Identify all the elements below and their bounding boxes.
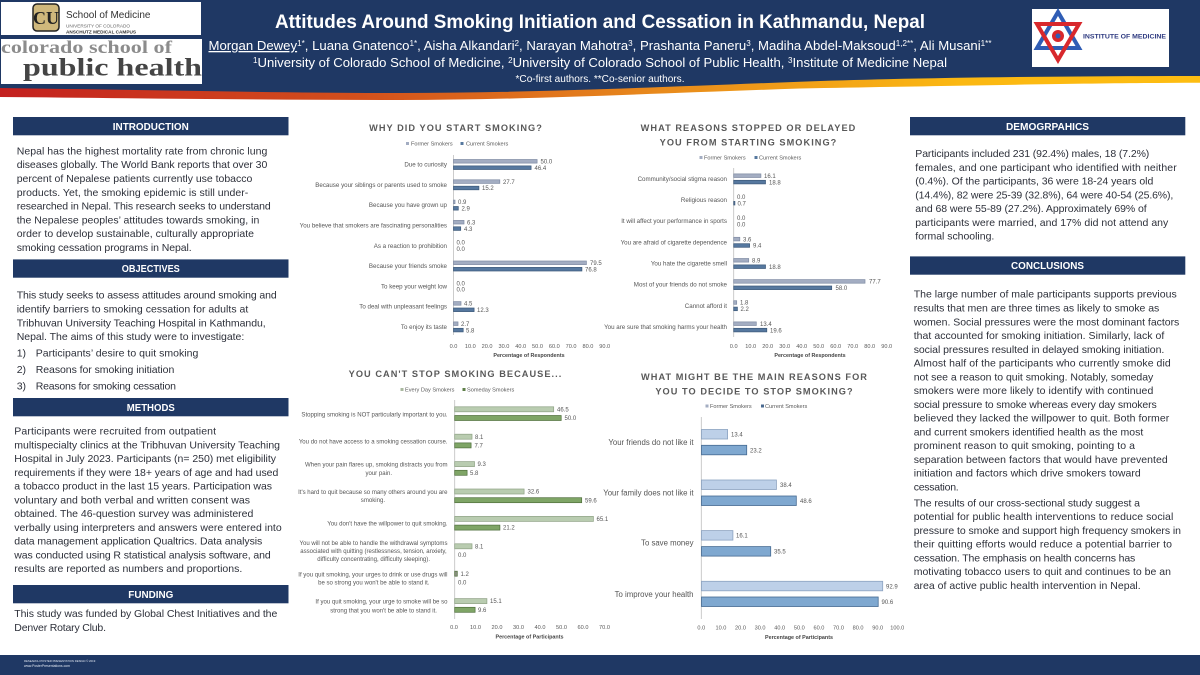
authors: , Luana Gnatenco [305, 38, 409, 53]
category labels: It will affect your performance in sports [621, 218, 727, 225]
bars and values: 8.9 [752, 258, 761, 264]
text: introduction body: order to develop sustainable, culturally appropriate [17, 228, 254, 240]
footer credit: RESEARCH POSTER PRESENTATION DESIGN © 2019 [24, 659, 96, 663]
category labels: You believe that smokers are fascinating personalities [300, 222, 447, 230]
heading: demographics [910, 117, 1185, 135]
heading: methods [13, 398, 288, 416]
text: objectives body: Reasons for smoking initiation [36, 364, 174, 376]
x axis [730, 344, 892, 359]
header accent stripe [0, 76, 1200, 100]
text: conclusions paragraph 1: The large number of male participants supports previous [914, 289, 1177, 301]
panel: methods [13, 398, 288, 575]
text: funding body: This study was funded by Global Chest Initiatives and the [14, 608, 277, 620]
category labels: Community/social stigma reason [638, 176, 728, 183]
bars and values: 9.4 [753, 244, 762, 250]
bars and values: 76.8 [585, 267, 597, 273]
bars and values: 92.9 [886, 584, 898, 590]
bars and values [734, 174, 881, 334]
legend [706, 404, 807, 410]
title: Attitudes Around Smoking Initiation and Cessation in Kathmandu, Nepal [275, 11, 925, 33]
text: objectives body: 2) [17, 364, 26, 376]
x axis: 70.0 [847, 344, 858, 350]
chart: main reasons to decide to stop smoking [603, 372, 904, 641]
heading: conclusions [910, 256, 1185, 275]
text: conclusions paragraph 1: women. Social pressures were the most dominant factors [913, 316, 1179, 328]
text: introduction body: percent of Nepalese patients currently use tobacco [17, 173, 252, 185]
bars and values: 0.0 [458, 553, 467, 559]
text: conclusions paragraph 1: that accounted for smoking initiation. Similarly, lack of [914, 330, 1164, 342]
x axis: 10.0 [470, 625, 481, 631]
heading: funding: FUNDING [128, 590, 174, 601]
x axis: 90.0 [881, 344, 892, 350]
x axis: 50.0 [532, 344, 543, 350]
text: conclusions paragraph 1: initiation and factors which drive smokers toward [914, 468, 1141, 480]
bars and values: 15.1 [490, 599, 502, 605]
text: methods body: Participants were recruited from outpatient [14, 426, 216, 438]
x axis: Percentage of Respondents [774, 353, 846, 359]
x axis: 50.0 [794, 625, 805, 631]
text: objectives body: Participants’ desire to quit smoking [36, 347, 198, 359]
x axis: 0.0 [697, 625, 705, 631]
category labels: To deal with unpleasant feelings [359, 304, 447, 311]
category labels [298, 413, 448, 614]
heading: introduction: INTRODUCTION [113, 122, 189, 133]
bars and values: 38.4 [780, 483, 792, 489]
co-author note: *Co-first authors. **Co-senior authors. [516, 74, 684, 85]
logo: CU School of Medicine [1, 2, 201, 35]
x axis: 40.0 [535, 625, 545, 631]
bars and values: 7.7 [474, 444, 484, 450]
category labels: Because your friends smoke [369, 263, 448, 270]
bars and values: 46.4 [534, 166, 547, 172]
x axis: 20.0 [482, 344, 493, 350]
bars and values: 0.0 [456, 288, 466, 294]
text: methods body: obtained. The 46-question survey was administered [14, 508, 253, 520]
logo: Institute of Medicine [1032, 9, 1169, 67]
logo: CU School of Medicine: School of Medicine [66, 10, 151, 21]
bars and values: 0.0 [737, 195, 746, 201]
bars and values: 0.0 [456, 241, 466, 247]
category labels: Your friends do not like it [608, 438, 694, 447]
authors: 3 [628, 39, 633, 48]
heading: methods: METHODS [127, 403, 175, 414]
heading: objectives: OBJECTIVES [122, 264, 180, 275]
x axis [450, 344, 610, 359]
x axis: 40.0 [774, 625, 785, 631]
bars and values [455, 407, 609, 614]
x axis: 60.0 [830, 344, 841, 350]
text: conclusions paragraph 2 [914, 497, 1181, 592]
x axis: 0.0 [450, 625, 458, 631]
authors: , Ali Musani [913, 38, 981, 53]
category labels: You are afraid of cigarette dependence [621, 239, 728, 246]
category labels: To save money [641, 539, 694, 548]
bars and values: 0.0 [458, 581, 467, 587]
legend [400, 388, 514, 394]
text: demographics body: and 68 were 55-89 (27.2%). Approximately 69% of [915, 203, 1147, 215]
category labels: strong that you won't be able to stand it. [330, 608, 437, 614]
x axis: 20.0 [735, 625, 746, 631]
text: introduction body: Nepal has the highest mortality rate from chronic lung [17, 145, 267, 157]
x axis: 30.0 [755, 625, 766, 631]
bars and values [454, 160, 602, 334]
authors: 1* [409, 39, 417, 48]
category labels: You don't have the willpower to quit smoking. [327, 521, 448, 527]
text: objectives body: 1) [17, 347, 26, 359]
legend [700, 156, 801, 162]
text: conclusions paragraph 1: prominent reason to quit smoking, pointing to a [914, 440, 1135, 452]
bars and values: 3.6 [743, 237, 752, 243]
affiliations: University of Colorado School of Medicine, [257, 55, 508, 70]
heading: funding [13, 585, 288, 603]
x axis: 30.0 [779, 344, 790, 350]
chart title: WHAT MIGHT BE THE MAIN REASONS FOR [641, 372, 868, 382]
chart title: YOU FROM STARTING SMOKING? [660, 138, 837, 148]
text: methods body: data management application Qualtrics. Data analysis [14, 536, 262, 548]
x axis: 0.0 [730, 344, 738, 350]
bars and values: 2.9 [462, 206, 471, 212]
text: methods body: was conducted using R statistical analysis software, and [13, 549, 271, 561]
category labels: difficulty concentrating, difficulty sleeping). [317, 557, 430, 563]
category labels: To keep your weight low [381, 283, 448, 290]
text: methods body: a tobacco product in the last 15 years. Participation was [14, 481, 272, 493]
bars and values: 12.3 [477, 308, 489, 314]
bars and values: 32.6 [528, 490, 540, 496]
bars and values: 2.7 [461, 322, 470, 328]
legend: Former Smokers [704, 156, 746, 162]
text: demographics body: (14.4%), 82 were 25-39 (32.8%), 64 were 40-54 (25.6%), [915, 189, 1173, 201]
x axis: 70.0 [599, 625, 610, 631]
bars and values [702, 430, 898, 606]
bars and values: 6.3 [467, 220, 476, 226]
category labels [604, 176, 728, 331]
text: conclusions paragraph 1: cessation. [914, 481, 959, 493]
text: methods body [13, 426, 282, 575]
bars and values: 50.0 [564, 416, 577, 422]
bars and values: 48.6 [800, 499, 812, 505]
category labels: You are sure that smoking harms your health [604, 324, 728, 331]
bars and values: 90.6 [882, 600, 894, 606]
bars and values: 58.0 [836, 286, 848, 292]
panel: objectives [13, 259, 288, 393]
chart title: WHY DID YOU START SMOKING? [369, 123, 543, 133]
bars and values: 13.4 [760, 322, 772, 328]
bars and values: 0.7 [738, 201, 747, 207]
authors: 1,2** [896, 39, 913, 48]
x axis: 90.0 [599, 344, 610, 350]
text: funding body: Denver Rotary Club. [14, 622, 106, 634]
bars and values: 35.5 [774, 550, 786, 556]
x axis: Percentage of Participants [765, 635, 833, 641]
bars and values: 1.2 [460, 572, 470, 578]
chart: you can't stop smoking because [298, 369, 610, 641]
text: introduction body: researched in Nepal. This research seeks to understand [17, 201, 271, 213]
text: methods body: voluntary and both verbal and written consent was [14, 494, 250, 506]
panel: funding [13, 585, 288, 634]
x axis: 30.0 [498, 344, 509, 350]
bars and values: 27.7 [503, 180, 515, 186]
bars and values: 46.5 [557, 407, 569, 413]
x axis: 10.0 [465, 344, 476, 350]
text: demographics body: participants were married, and 17% did not attend any [915, 217, 1169, 229]
x axis: 10.0 [745, 344, 756, 350]
legend: Someday Smokers [467, 388, 514, 394]
category labels: To enjoy its taste [401, 324, 448, 331]
x axis: 80.0 [864, 344, 875, 350]
logo: Colorado School of Public Health: colorado school of [1, 37, 173, 57]
logo: Colorado School of Public Health: public health [23, 54, 202, 82]
bars and values: 9.6 [478, 608, 487, 614]
heading: demographics: DEMOGRPAHICS [1006, 122, 1089, 133]
affiliations: University of Colorado School of Public Health, [513, 55, 788, 70]
bars and values: 4.5 [464, 302, 473, 308]
category labels: It's hard to quit because so many others around you are [298, 490, 448, 496]
authors: , Madiha Abdel-Maksoud [751, 38, 896, 53]
bars and values: 1.8 [740, 301, 749, 307]
bars and values: 8.1 [475, 435, 484, 441]
affiliations: 1 [253, 56, 258, 65]
x axis: Percentage of Participants [495, 635, 564, 641]
authors: 2 [515, 39, 520, 48]
category labels: be so strong you won't be able to stand it. [318, 581, 430, 587]
header banner [0, 0, 1200, 100]
text: introduction body [17, 145, 271, 254]
category labels: Because you have grown up [369, 202, 448, 209]
text: objectives body [17, 290, 277, 393]
x axis: 100.0 [890, 625, 904, 631]
bars and values: 23.2 [750, 448, 762, 454]
category labels: To improve your health [615, 590, 694, 599]
category labels: Cannot afford it [685, 303, 727, 310]
category labels: As a reaction to prohibition [374, 243, 448, 250]
x axis: 60.0 [813, 625, 824, 631]
x axis: 80.0 [853, 625, 864, 631]
text: objectives body: Nepal. The aims of this study were to investigate: [17, 331, 244, 343]
text: conclusions paragraph 2: pressure to smoke and support high frequency smokers in [914, 525, 1181, 537]
logo: Colorado School of Public Health [1, 37, 202, 84]
chart: why did you start smoking [300, 123, 610, 359]
bars and values: 65.1 [596, 517, 609, 523]
text: demographics body: females, and one participant who identified with neither [915, 162, 1177, 174]
category labels: Due to curiosity [404, 162, 448, 169]
chart title: WHAT REASONS STOPPED OR DELAYED [641, 123, 856, 133]
text: introduction body: smoking cessation programs in Nepal. [17, 242, 192, 254]
category labels: smoking. [361, 498, 385, 504]
legend: Former Smokers [710, 404, 752, 410]
authors: Morgan Dewey [208, 38, 298, 53]
x axis: 70.0 [833, 625, 844, 631]
category labels: Stopping smoking is NOT particularly important to you. [301, 413, 448, 419]
bars and values: 0.0 [737, 216, 746, 222]
bars and values: 16.1 [764, 174, 776, 180]
affiliations: Institute of Medicine Nepal [793, 55, 947, 70]
text: objectives body: Tribhuvan University Teaching Hospital in Kathmandu, [17, 317, 266, 329]
logo: CU School of Medicine: CU [33, 8, 59, 28]
text: methods body: verbally using interpreters and answers were entered into [14, 522, 282, 534]
bars and values: 13.4 [731, 432, 743, 438]
text: conclusions paragraph 1: smokers were more likely to identify with continued [914, 385, 1153, 397]
text: introduction body: diseases globally. The World Bank reports that over 30 [17, 159, 267, 171]
legend: Current Smokers [759, 156, 801, 162]
affiliations: 3 [788, 56, 793, 65]
x axis: 90.0 [872, 625, 883, 631]
bars and values: 18.8 [769, 180, 781, 186]
x axis: 60.0 [578, 625, 588, 631]
legend: Former Smokers [411, 142, 453, 148]
legend: Every Day Smokers [405, 388, 455, 394]
text: methods body: results are reported as numbers and proportions. [14, 563, 242, 575]
text: demographics body: (0.4%). Of the participants, 36 were 18-24 years old [915, 176, 1153, 188]
category labels: If you quit smoking, your urge to smoke will be so [315, 600, 448, 606]
bars and values: 2.2 [740, 307, 750, 313]
bars and values: 59.6 [585, 498, 597, 504]
authors: 1** [981, 39, 992, 48]
category labels: associated with quitting (restlessness, tension, anxiety, [300, 549, 447, 555]
x axis [450, 625, 610, 641]
x axis: 80.0 [582, 344, 593, 350]
bars and values: 0.0 [737, 223, 746, 229]
x axis: 40.0 [796, 344, 807, 350]
text: objectives body: This study seeks to assess attitudes around smoking and [17, 290, 277, 302]
logo: Institute of Medicine: INSTITUTE OF MEDICINE [1083, 34, 1166, 40]
category labels: Your family does not like it [603, 488, 694, 497]
bars and values: 21.2 [503, 526, 515, 532]
bars and values: 5.8 [466, 328, 475, 334]
x axis: 60.0 [549, 344, 560, 350]
text: demographics body: Participants included 231 (92.4%) males, 18 (7.2%) [915, 148, 1149, 160]
text: objectives body: Reasons for smoking cessation [36, 381, 176, 393]
x axis: Percentage of Respondents [493, 353, 565, 359]
bars and values: 79.5 [590, 261, 602, 267]
category labels: If you quit smoking, your urges to drink or use drugs will [298, 573, 448, 579]
text: introduction body: the Nepalese peoples’ attitudes towards smoking, in [17, 214, 259, 226]
bars and values: 8.1 [475, 544, 484, 550]
category labels: You do not have access to a smoking cessation course. [299, 439, 448, 445]
heading: introduction [13, 117, 288, 135]
authors: 1* [297, 39, 305, 48]
bars and values: 19.6 [770, 328, 782, 334]
category labels: Because your siblings or parents used to smoke [315, 182, 448, 189]
text: conclusions paragraph 2: potential for public health interventions to reduce social [914, 511, 1173, 523]
text: conclusions paragraph 1: not see a reason to quit smoking. Notably, someday [914, 371, 1154, 383]
heading: conclusions: CONCLUSIONS [1011, 261, 1084, 272]
text: conclusions paragraph 2: motivating tobacco users to quit and continues to be an [914, 566, 1171, 578]
legend [406, 142, 508, 148]
x axis: 30.0 [513, 625, 524, 631]
footer credit: www.PosterPresentations.com [24, 664, 70, 668]
chart title: YOU TO DECIDE TO STOP SMOKING? [655, 386, 854, 396]
text: conclusions paragraph 1: results that men are three times as likely to smoke as [914, 302, 1159, 314]
text: conclusions paragraph 1 [913, 289, 1179, 493]
category labels: You hate the cigarette smell [651, 260, 727, 268]
category labels: your pain. [365, 471, 392, 477]
bars and values: 0.0 [456, 281, 466, 287]
text: objectives body: identify barriers to smoking cessation for adults at [17, 304, 248, 316]
text: conclusions paragraph 2: their quitting efforts would reduce a potential barrier to [914, 539, 1172, 551]
x axis: 70.0 [566, 344, 577, 350]
text: objectives body: 3) [17, 381, 26, 393]
bars and values: 0.9 [458, 200, 467, 206]
text: conclusions paragraph 1: believed they lacked the willpower to quit. Both former [914, 413, 1170, 425]
text: conclusions paragraph 1: Almost half of the participants who currently smoke did [914, 358, 1171, 370]
text: conclusions paragraph 1: and current smokers identified health as the most [914, 426, 1143, 438]
x axis: 40.0 [515, 344, 526, 350]
bars and values: 18.8 [769, 265, 781, 271]
logo: CU School of Medicine: UNIVERSITY OF COLORADO [66, 24, 130, 28]
text: methods body: Hospital in July 2023. Participants (n= 250) met eligibility [14, 453, 277, 465]
authors: , Aisha Alkandari [417, 38, 515, 53]
authors: , Narayan Mahotra [519, 38, 629, 53]
x axis: 20.0 [492, 625, 502, 631]
category labels: When your pain flares up, smoking distracts you from [305, 462, 448, 468]
category labels: Religious reason [681, 197, 728, 204]
authors: , Prashanta Paneru [633, 38, 746, 53]
panel: introduction [13, 117, 288, 254]
text: conclusions paragraph 1: separation between factors that would have prevented [914, 454, 1168, 466]
text: conclusions paragraph 1: social pressure to smoke whereas every day smokers [914, 399, 1157, 411]
category labels: Most of your friends do not smoke [634, 282, 728, 289]
panel: conclusions [910, 256, 1185, 592]
x axis: 10.0 [715, 625, 726, 631]
category labels [300, 162, 448, 331]
authors: 3 [746, 39, 751, 48]
category labels [603, 438, 694, 599]
x axis: 20.0 [762, 344, 773, 350]
bars and values: 4.3 [464, 227, 473, 233]
affiliations: 2 [508, 56, 513, 65]
text: conclusions paragraph 2: area of active public health intervention in Nepal. [914, 580, 1141, 592]
logo: CU School of Medicine: ANSCHUTZ MEDICAL CAMPUS [66, 30, 136, 34]
bars and values: 15.2 [482, 186, 494, 192]
text: demographics body [915, 148, 1177, 243]
text: conclusions paragraph 1: social pressures resulted in delayed smoking initiation. [914, 344, 1164, 356]
text: conclusions paragraph 2: The results of our cross-sectional study suggest a [914, 497, 1140, 509]
bars and values: 5.8 [470, 471, 479, 477]
bars and values: 77.7 [869, 280, 881, 286]
panel: demographics [910, 117, 1185, 243]
category labels: You will not be able to handle the withdrawal symptoms [299, 541, 448, 547]
text: introduction body: products. Yet, the smoking epidemic is still under- [17, 187, 249, 199]
chart title: YOU CAN'T STOP SMOKING BECAUSE... [349, 369, 562, 379]
legend: Current Smokers [765, 404, 807, 410]
bars and values: 9.3 [478, 462, 487, 468]
x axis: 50.0 [813, 344, 824, 350]
footer bar [0, 655, 1200, 675]
x axis: 0.0 [450, 344, 457, 350]
x axis: 50.0 [556, 625, 567, 631]
bars and values: 50.0 [540, 160, 553, 166]
bars and values: 16.1 [736, 534, 748, 540]
text: methods body: requirements if they were 18+ years of age and had used [14, 467, 278, 479]
text: demographics body: formal schooling. [915, 231, 994, 243]
text: methods body: multispecialty clinics at the Tribhuvan University Teaching [14, 439, 280, 451]
legend: Current Smokers [466, 142, 508, 148]
text: conclusions paragraph 2: cessation. The emphasis on health concerns has [914, 552, 1135, 564]
heading: objectives [13, 259, 288, 278]
bars and values: 0.0 [456, 247, 466, 253]
x axis [697, 625, 904, 641]
chart: what reasons stopped or delayed you [604, 123, 892, 359]
text: funding body [14, 608, 277, 634]
